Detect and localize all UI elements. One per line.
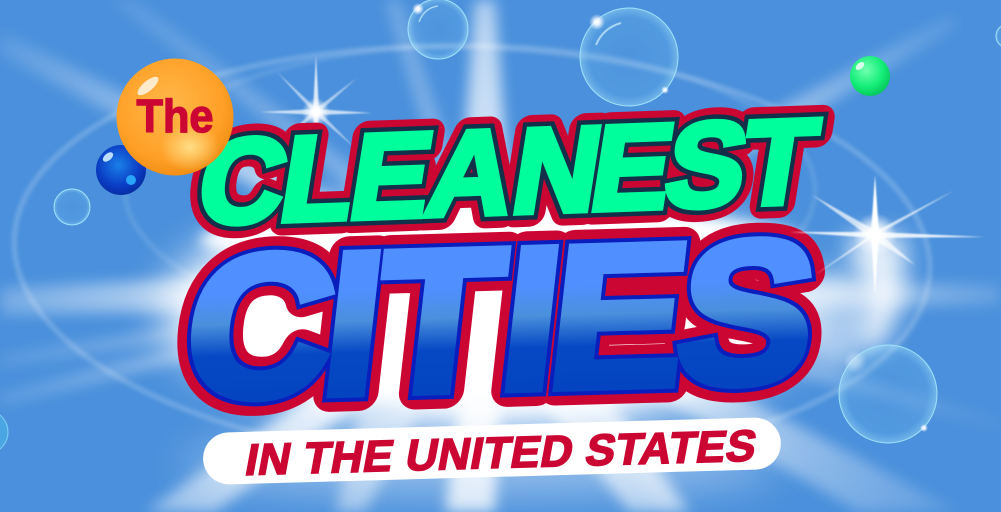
bubble: top right large	[580, 8, 678, 106]
subtitle pill	[202, 417, 782, 486]
headline: CLEANEST: CLEANEST	[190, 94, 826, 250]
icon: green ball	[850, 56, 890, 96]
bubble: left small	[54, 189, 90, 225]
icon: sparkle upper left	[260, 55, 372, 170]
orange sphere with The	[116, 58, 234, 176]
icon: blue ball	[96, 145, 146, 195]
subtitle text: IN THE UNITED STATES	[242, 422, 760, 485]
icon: sparkle right	[790, 175, 985, 295]
bubble: lower right large	[839, 345, 937, 443]
bubble: left edge	[0, 410, 8, 454]
text: The: The	[136, 90, 214, 142]
headline: CITIES: CITIES	[175, 198, 827, 442]
bubble: top centre	[408, 0, 468, 59]
headline: CLEANEST: CLEANEST	[190, 94, 826, 250]
headline: CLEANEST: CLEANEST	[190, 94, 826, 250]
headline: CITIES: CITIES	[175, 198, 827, 442]
headline: CITIES: CITIES	[175, 198, 827, 442]
bubble: right edge	[996, 24, 1001, 48]
